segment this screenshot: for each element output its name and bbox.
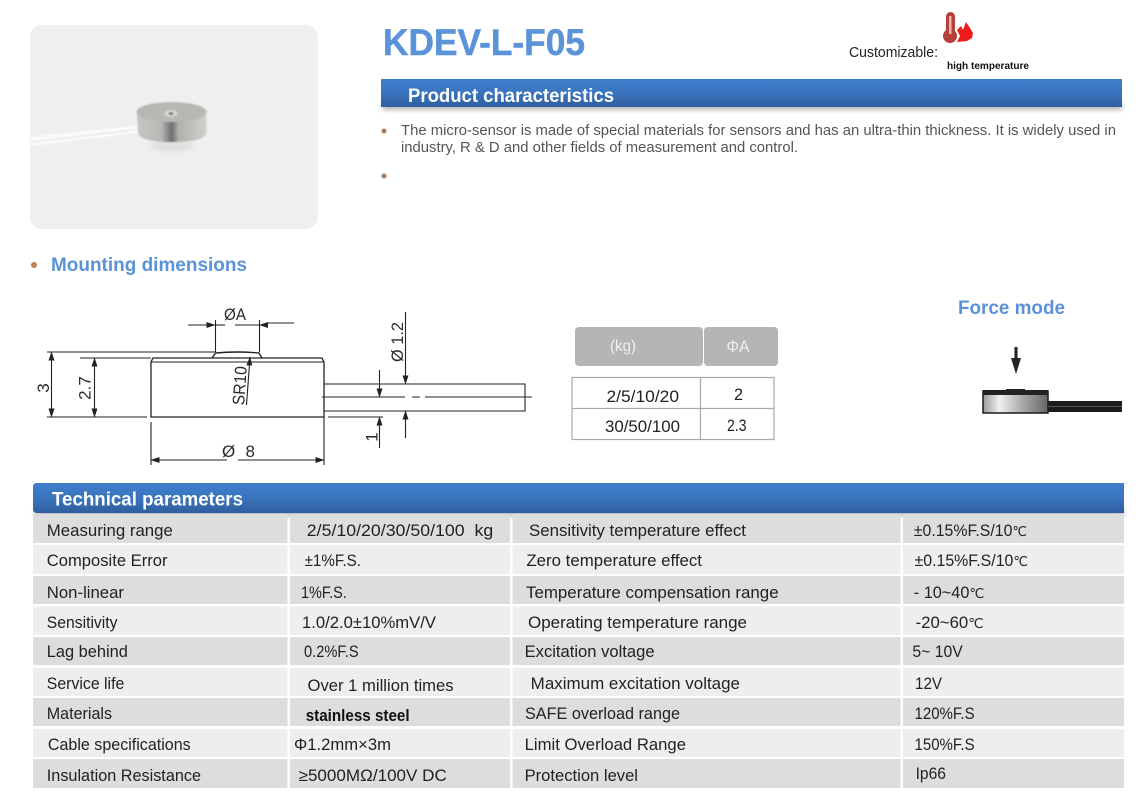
column: parameter names left: Sensitivity xyxy=(47,614,118,632)
text block: product description xyxy=(382,123,1116,178)
heading bar: product characteristics: Product characteristics xyxy=(408,86,614,107)
column: values right: 120%F.S xyxy=(914,705,975,723)
dimension label: SR10: SR10 xyxy=(229,366,251,406)
heading bar: technical parameters xyxy=(33,483,1124,516)
column: parameter names right: Excitation voltage xyxy=(525,643,655,661)
table body: 30/50/100 xyxy=(605,418,680,436)
table header: (kg) xyxy=(610,338,636,355)
table body: 2 xyxy=(734,386,743,404)
column: values right: - 10~40℃ xyxy=(914,584,984,602)
column: parameter names left xyxy=(47,522,201,785)
heading bar: technical parameters: Technical parameters xyxy=(52,490,243,510)
icon: force mode sensor xyxy=(983,389,1122,413)
text block: product description: The micro-sensor is made of special materials for sensors and has an ultra-thin thickness. It is widely used in xyxy=(401,123,1116,139)
dimension label: 3: 3 xyxy=(34,383,53,393)
column: values left: ≥5000MΩ/100V DC xyxy=(299,767,447,785)
column: parameter names left: Materials xyxy=(47,705,112,723)
table body: 2/5/10/20 xyxy=(606,388,679,406)
row backgrounds xyxy=(33,514,1124,788)
column: values right: ±0.15%F.S/10℃ xyxy=(914,522,1027,540)
chart: mounting dimension drawing xyxy=(34,305,532,465)
icon: thermometer with flame xyxy=(943,12,973,43)
panel: product photo xyxy=(30,25,318,229)
column: values right: 150%F.S xyxy=(914,736,975,754)
text block: product description: industry, R & D and other fields of measurement and control. xyxy=(401,140,798,156)
column: parameter names right: Sensitivity temperature effect xyxy=(529,522,746,540)
customizable label xyxy=(849,12,1029,72)
column: parameter names right: Limit Overload Range xyxy=(525,736,686,754)
heading: mounting dimensions: Mounting dimensions xyxy=(51,255,247,276)
column: values right: 5~ 10V xyxy=(912,643,963,661)
table header: ΦA xyxy=(726,337,750,356)
column: values left: ±1%F.S. xyxy=(305,552,361,570)
table body xyxy=(572,378,774,440)
column: values right: -20~60℃ xyxy=(916,614,984,632)
column: parameter names right: SAFE overload range xyxy=(525,705,680,723)
column: values left xyxy=(294,522,493,785)
table: load capacity vs phi A xyxy=(572,327,778,440)
column: values left: 1.0/2.0±10%mV/V xyxy=(302,614,436,632)
column: parameter names left: Non-linear xyxy=(47,584,125,602)
column: parameter names left: Insulation Resistance xyxy=(47,767,201,785)
dimension label: phi A: ØA xyxy=(224,305,247,324)
dimension label: phi 1.2: Ø 1.2 xyxy=(388,322,407,362)
column: values left: Over 1 million times xyxy=(308,677,454,695)
heading: force mode: Force mode xyxy=(958,298,1065,319)
column: parameter names left: Measuring range xyxy=(47,522,173,540)
heading bar: product characteristics xyxy=(381,79,1122,110)
column: parameter names right: Operating temperature range xyxy=(528,614,747,632)
column: values right: 12V xyxy=(915,675,942,693)
column: parameter names left: Lag behind xyxy=(47,643,128,661)
dimension label: 1: 1 xyxy=(362,432,382,442)
column: values left: 2/5/10/20/30/50/100 kg xyxy=(307,522,493,540)
column: parameter names right: Maximum excitation voltage xyxy=(531,675,740,693)
column: values right: Ip66 xyxy=(916,765,946,783)
table body: 2.3 xyxy=(727,417,746,435)
table header xyxy=(575,327,778,366)
dimension label: 2.7: 2.7 xyxy=(76,376,94,400)
column: values right: ±0.15%F.S/10℃ xyxy=(914,552,1028,570)
table: technical parameters xyxy=(33,514,1124,788)
title: KDEV-L-F05 xyxy=(383,22,585,63)
column: parameter names left: Composite Error xyxy=(47,552,168,570)
column: parameter names right: Temperature compensation range xyxy=(526,584,779,602)
customizable label: Customizable: xyxy=(849,45,938,61)
column: values left: Φ1.2mm×3m xyxy=(294,736,391,754)
column: values left: stainless steel xyxy=(306,707,410,725)
column: parameter names right: Zero temperature effect xyxy=(526,552,702,570)
icon: force mode arrow xyxy=(1011,347,1021,374)
column: values left: 0.2%F.S xyxy=(304,643,359,661)
column: parameter names left: Service life xyxy=(47,675,124,693)
column: parameter names left: Cable specifications xyxy=(48,736,191,754)
dimension label: phi 8: Ø 8 xyxy=(222,442,255,461)
column: parameter names right xyxy=(525,522,779,785)
high temperature label: high temperature xyxy=(947,60,1029,72)
column: values right xyxy=(912,522,1028,783)
column: parameter names right: Protection level xyxy=(525,767,638,785)
icon: sensor photo xyxy=(30,102,206,152)
column: values left: 1%F.S. xyxy=(301,584,347,602)
